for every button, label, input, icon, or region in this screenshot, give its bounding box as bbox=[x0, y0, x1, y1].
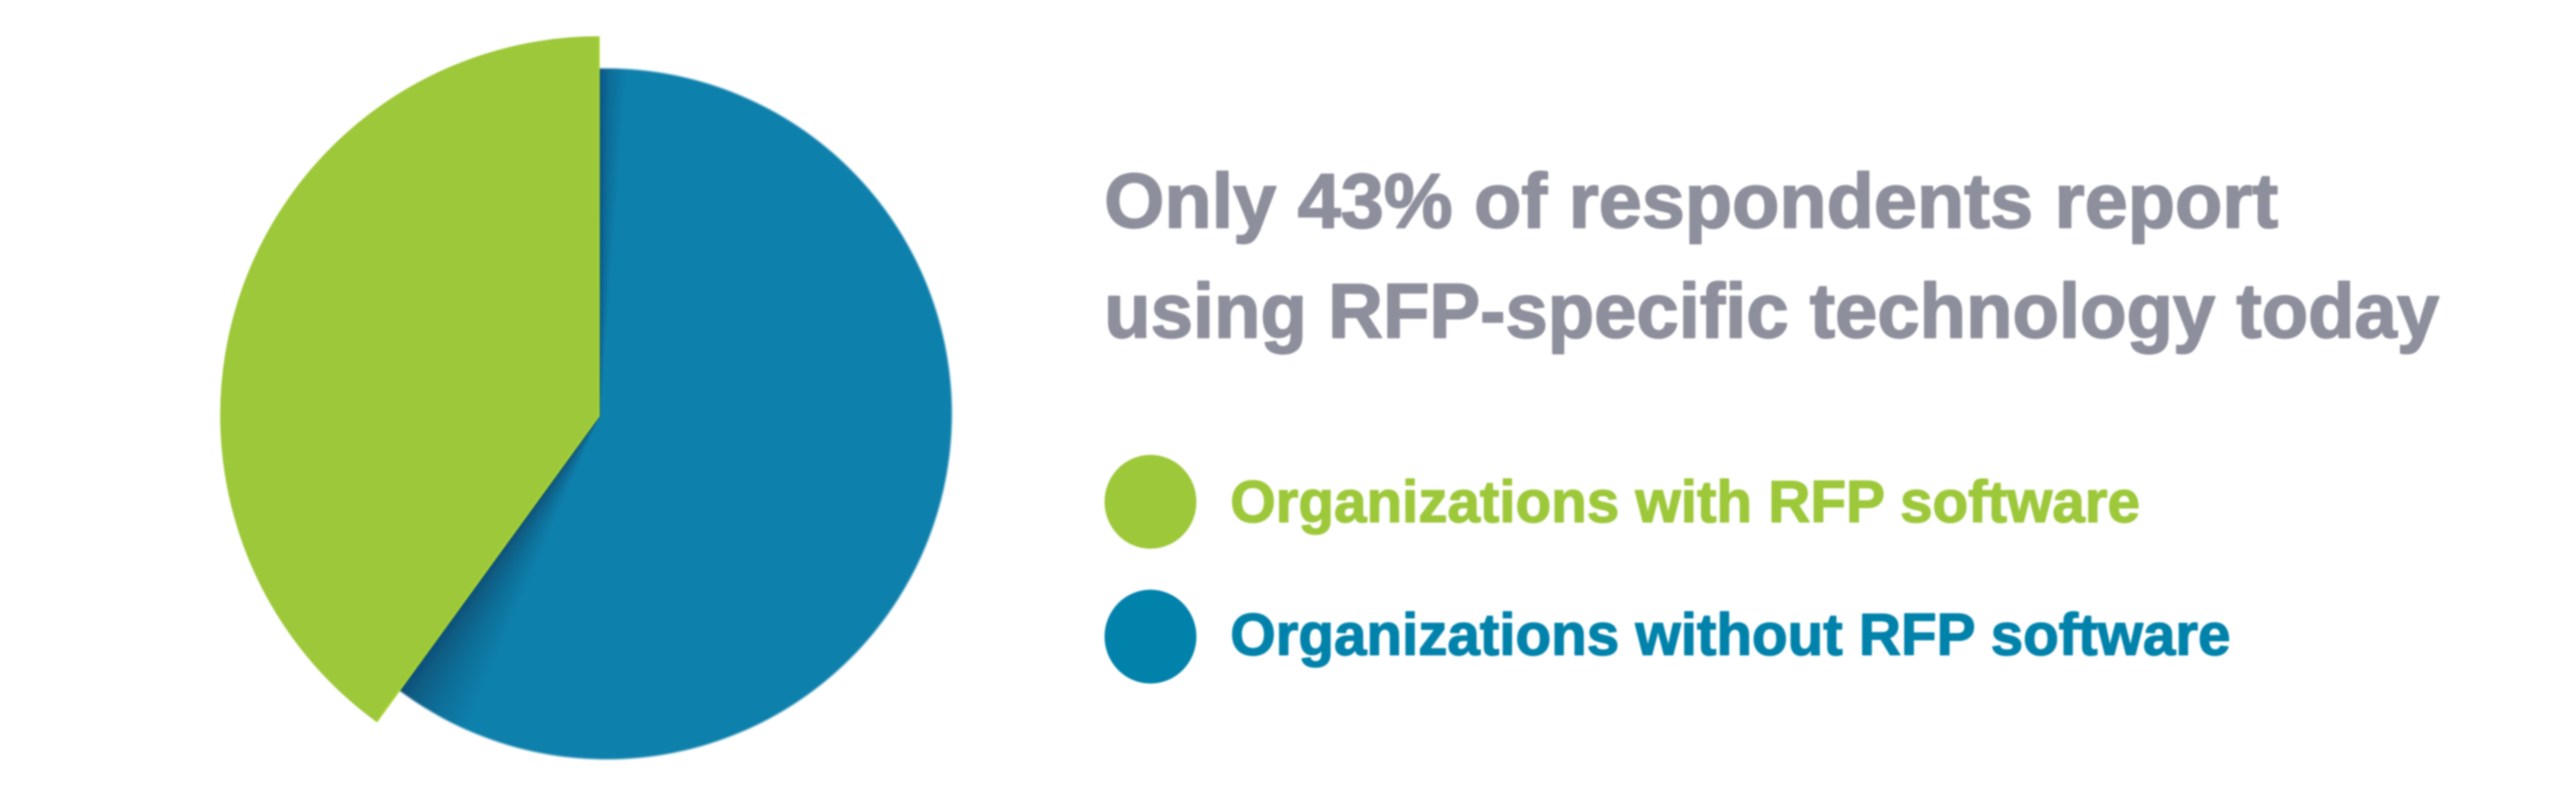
legend item: without RFP software bbox=[1104, 590, 2231, 684]
legend item: with RFP software: Organizations with RFP software bbox=[1230, 468, 2140, 535]
legend bbox=[1104, 455, 2231, 684]
heading: using RFP-specific technology today bbox=[1104, 268, 2439, 354]
pie chart bbox=[219, 35, 954, 761]
heading bbox=[1104, 158, 2439, 354]
legend item: without RFP software: Organizations without RFP software bbox=[1230, 601, 2231, 667]
pie slice: organizations with RFP software (43%) bbox=[219, 35, 601, 723]
legend item: with RFP software bbox=[1104, 455, 2140, 549]
pie slice: organizations without RFP software (57%) bbox=[261, 68, 952, 759]
heading: Only 43% of respondents report bbox=[1104, 158, 2278, 244]
